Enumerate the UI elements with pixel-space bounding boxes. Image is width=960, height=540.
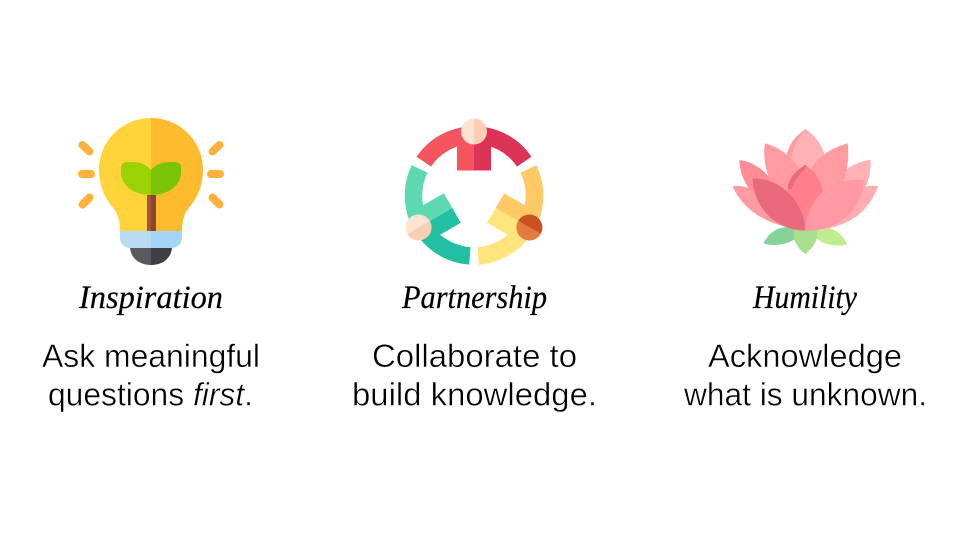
panel: inspiration	[42, 118, 260, 412]
text: Acknowledge what is unknown: Acknowledge	[708, 338, 902, 374]
heading: Partnership: Partnership	[401, 280, 547, 316]
text: Ask meaningful questions first: questions first.	[48, 376, 253, 412]
panel: humility	[683, 129, 927, 412]
icon: lotus flower	[733, 129, 878, 254]
text: Collaborate to build knowledge: Collaborate to	[372, 338, 577, 374]
text: Ask meaningful questions first: Ask meaningful	[42, 338, 260, 374]
person: red	[424, 118, 524, 170]
text: Collaborate to build knowledge	[352, 338, 597, 412]
text: Ask meaningful questions first	[42, 338, 260, 412]
person: green	[382, 165, 477, 277]
text: Collaborate to build knowledge: build knowledge.	[352, 376, 597, 412]
icon: light bulb with sprout	[82, 118, 220, 265]
text: Acknowledge what is unknown: what is unknown.	[683, 376, 927, 412]
heading: Humility: Humility	[752, 280, 857, 316]
person: yellow	[471, 165, 566, 277]
text: Acknowledge what is unknown	[683, 338, 927, 412]
panel: partnership	[352, 118, 597, 412]
icon: three people in a circle	[382, 118, 566, 277]
heading: Inspiration: Inspiration	[78, 280, 223, 316]
